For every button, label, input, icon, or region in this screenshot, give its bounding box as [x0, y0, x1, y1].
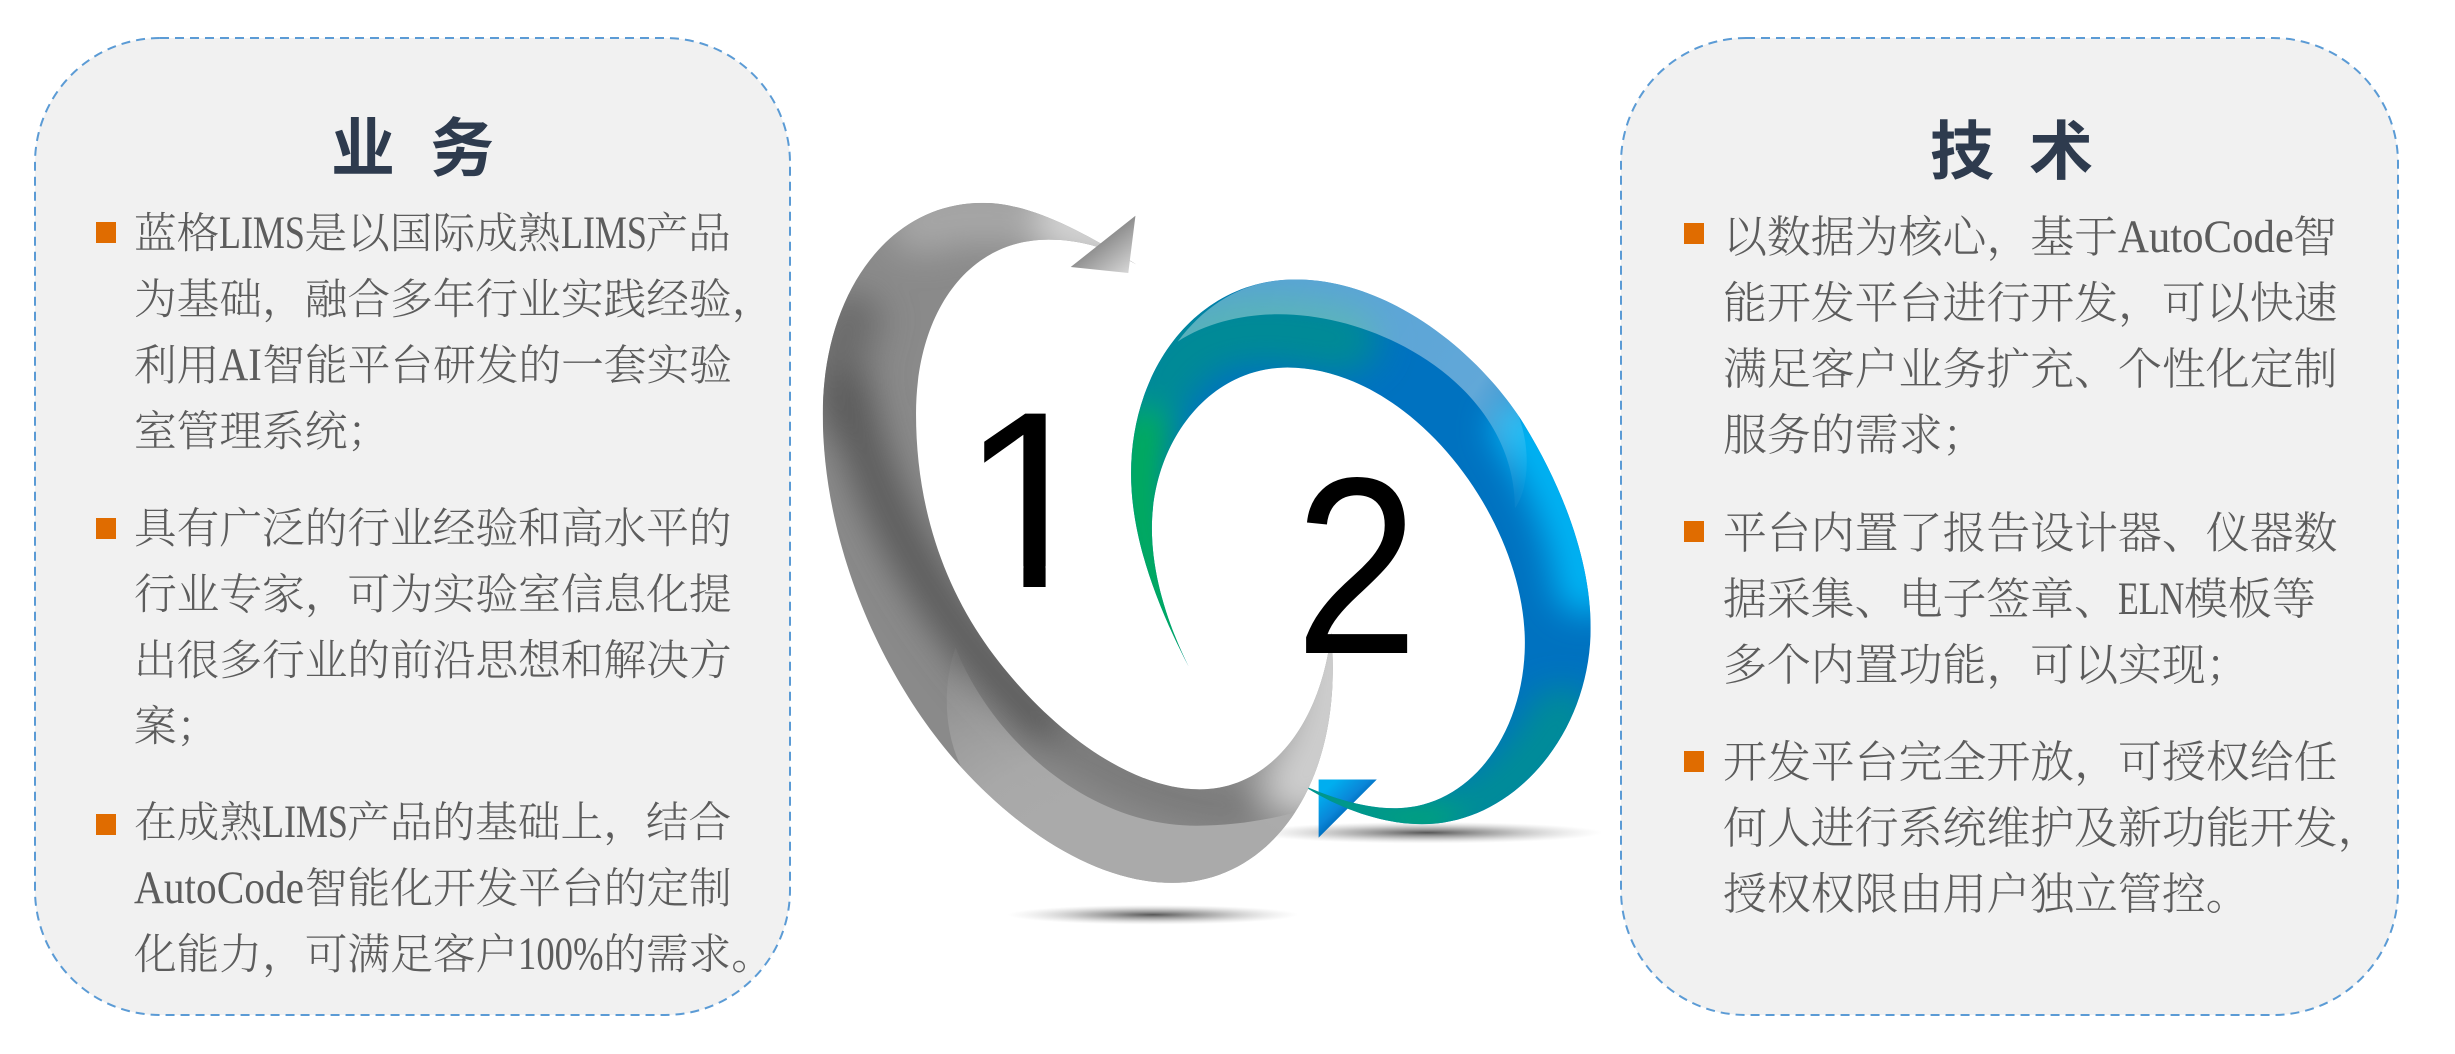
- text block: 技术 item 1: 能开发平台进行开发，可以快速: [1723, 267, 2337, 331]
- heading: 技术: 技术: [1930, 116, 2128, 188]
- heading: 业务: 业务: [331, 113, 529, 185]
- shadow under gray arrow: [1008, 905, 1298, 925]
- arrow 1: gray swoosh: [822, 202, 1333, 883]
- number 1: 1: [960, 360, 1100, 641]
- text block: 业务 item 2: 行业专家，可为实验室信息化提: [134, 561, 732, 622]
- number 2: 2: [1295, 426, 1418, 707]
- text block: 技术 item 3: [1684, 726, 2381, 922]
- arrow 2: blue-green swoosh: [1131, 280, 1591, 824]
- text block: 业务 item 1: 室管理系统；: [134, 398, 390, 459]
- panel: 业务: [34, 37, 791, 1016]
- text block: 技术 item 2: [1684, 497, 2337, 693]
- text block: 技术 item 3: 授权权限由用户独立管控。: [1723, 858, 2250, 922]
- bullet: [1684, 751, 1704, 772]
- text block: 技术 item 2: 据采集、电子签章、 模板等: [1723, 563, 2316, 627]
- text block: 技术 item 3: 何人进行系统维护及新功能开发，: [1723, 792, 2381, 856]
- bullet: [96, 222, 116, 243]
- text block: 技术 item 1: AutoCode: [2118, 211, 2294, 263]
- shadow under blue arrow: [1252, 822, 1603, 844]
- text block: 业务 item 1: AI: [219, 339, 262, 391]
- text block: 技术 item 2: 平台内置了报告设计器、仪器数: [1723, 497, 2337, 561]
- text block: 业务 item 1: 为基础，融合多年行业实践经验，: [134, 266, 774, 327]
- text block: 技术 item 2: 多个内置功能，可以实现；: [1723, 629, 2250, 693]
- bullet: [1684, 223, 1704, 244]
- text block: 技术 item 1: 满足客户业务扩充、个性化定制: [1723, 333, 2337, 397]
- text block: 业务 item 1: 利用 智能平台研发的一套实验: [134, 332, 732, 393]
- bullet: [1684, 521, 1704, 542]
- text block: 技术 item 1: [1684, 201, 2337, 463]
- text block: 技术 item 2: ELN: [2118, 573, 2184, 625]
- text block: 业务 item 2: 出很多行业的前沿思想和解决方: [134, 627, 732, 688]
- text block: 业务 item 2: [96, 495, 732, 754]
- text block: 业务 item 2: 具有广泛的行业经验和高水平的: [134, 495, 732, 556]
- text block: 业务 item 2: 案；: [134, 693, 219, 754]
- text block: 业务 item 1: LIMS: [219, 207, 305, 259]
- text block: 业务 item 3: LIMS: [262, 796, 348, 848]
- arrow 2: blue head: [1319, 779, 1377, 838]
- text block: 业务 item 1: LIMS: [560, 207, 646, 259]
- bullet: [96, 518, 116, 539]
- arrow 1: gray head: [1071, 216, 1135, 273]
- text block: 业务 item 3: 化能力，可满足客户 的需求。: [134, 921, 774, 982]
- text block: 业务 item 3: 100%: [518, 928, 604, 980]
- text block: 技术 item 3: 开发平台完全开放，可授权给任: [1723, 726, 2337, 790]
- text block: 业务 item 3: 在成熟 产品的基础上，结合: [134, 789, 731, 850]
- text block: 技术 item 1: 服务的需求；: [1723, 399, 1986, 463]
- text block: 业务 item 3: [96, 789, 774, 982]
- text block: 技术 item 1: 以数据为核心，基于 智: [1723, 201, 2337, 265]
- text block: 业务 item 3: AutoCode: [134, 862, 304, 914]
- text block: 业务 item 1: [96, 200, 774, 459]
- panel: 技术: [1620, 37, 2399, 1016]
- text block: 业务 item 3: 智能化开发平台的定制: [305, 855, 732, 916]
- central graphic: 1 and 2 cycle arrows: [822, 202, 1591, 924]
- text block: 业务 item 1: 蓝格 是以国际成熟 产品: [134, 200, 731, 261]
- bullet: [96, 814, 116, 835]
